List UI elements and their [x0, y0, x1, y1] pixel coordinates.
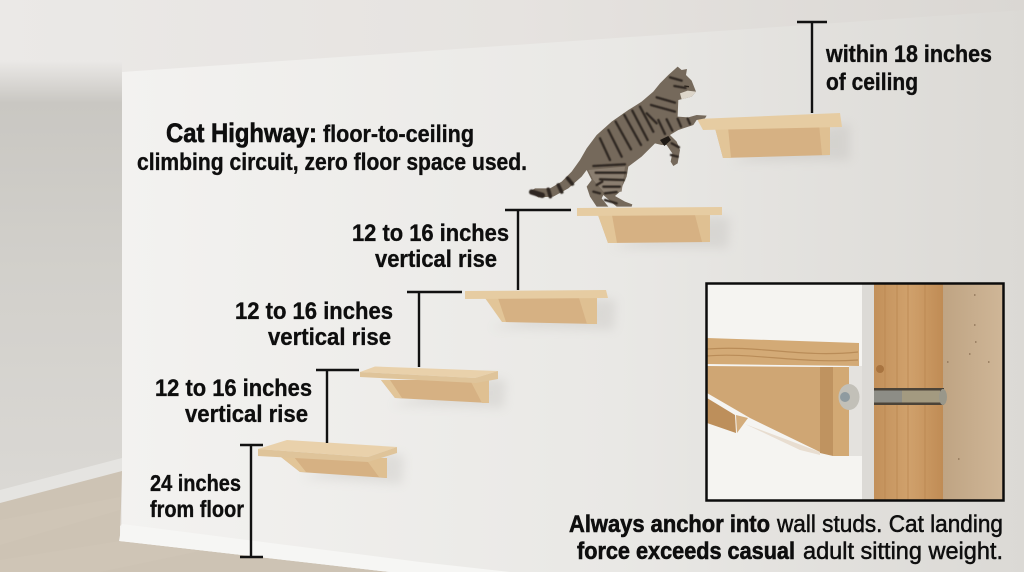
- label: rise 1: vertical rise: [185, 401, 308, 428]
- drywall section: [862, 284, 874, 500]
- label: rise 3: [352, 220, 509, 273]
- title: cat highway: climbing circuit, zero floor space used.: [137, 149, 527, 176]
- label: rise 3: vertical rise: [375, 246, 497, 273]
- label: ceiling clearance: of ceiling: [826, 69, 918, 96]
- label: rise 1: [155, 375, 312, 428]
- label: rise 2: vertical rise: [268, 324, 391, 351]
- measure: rise 1: [316, 370, 359, 443]
- label: ceiling clearance: within 18 inches: [825, 41, 992, 68]
- icon: tabby cat: [530, 67, 707, 207]
- label: rise 2: 12 to 16 inches: [235, 298, 393, 325]
- anchor bolt: [874, 388, 947, 405]
- measure: rise 3: [505, 210, 571, 290]
- inset frame: [706, 284, 1004, 500]
- label: rise 3: 12 to 16 inches: [352, 220, 509, 247]
- shelf 4: [577, 207, 722, 243]
- shelf 5: [697, 113, 842, 158]
- label: rise 1: 12 to 16 inches: [155, 375, 312, 402]
- shelf 1: [258, 440, 397, 478]
- measure: rise 2: [407, 292, 462, 367]
- measure: ceiling bracket: [797, 22, 827, 113]
- title: cat highway: floor-to-ceiling: [323, 121, 474, 148]
- label: ceiling clearance: [825, 41, 992, 96]
- callout: anchor warning: Always anchor into: [569, 511, 770, 538]
- shelf shadows: [300, 124, 850, 484]
- measure: floor height: [240, 445, 263, 557]
- label: rise 2: [235, 298, 393, 351]
- title: cat highway: [137, 118, 527, 176]
- label: floor height: 24 inches: [150, 470, 241, 496]
- wall stud: [874, 284, 943, 500]
- shelf 2: [360, 366, 498, 403]
- inset white wall: [707, 284, 863, 500]
- bracket shadow on wall: [849, 366, 862, 456]
- concrete behind stud: [943, 284, 1003, 500]
- label: floor height: from floor: [150, 496, 244, 522]
- callout: anchor warning: adult sitting weight.: [803, 538, 1003, 565]
- callout: anchor warning: wall studs. Cat landing: [776, 511, 1003, 538]
- panel: anchor detail inset: [706, 284, 1004, 500]
- shelf 3: [465, 290, 608, 324]
- title: cat highway: Cat Highway:: [166, 118, 317, 148]
- bolt head: [838, 384, 860, 410]
- label: floor height: [150, 470, 244, 522]
- callout: anchor warning: force exceeds casual: [577, 538, 795, 565]
- callout: anchor warning: [569, 511, 1003, 565]
- shelf bracket: [707, 338, 859, 456]
